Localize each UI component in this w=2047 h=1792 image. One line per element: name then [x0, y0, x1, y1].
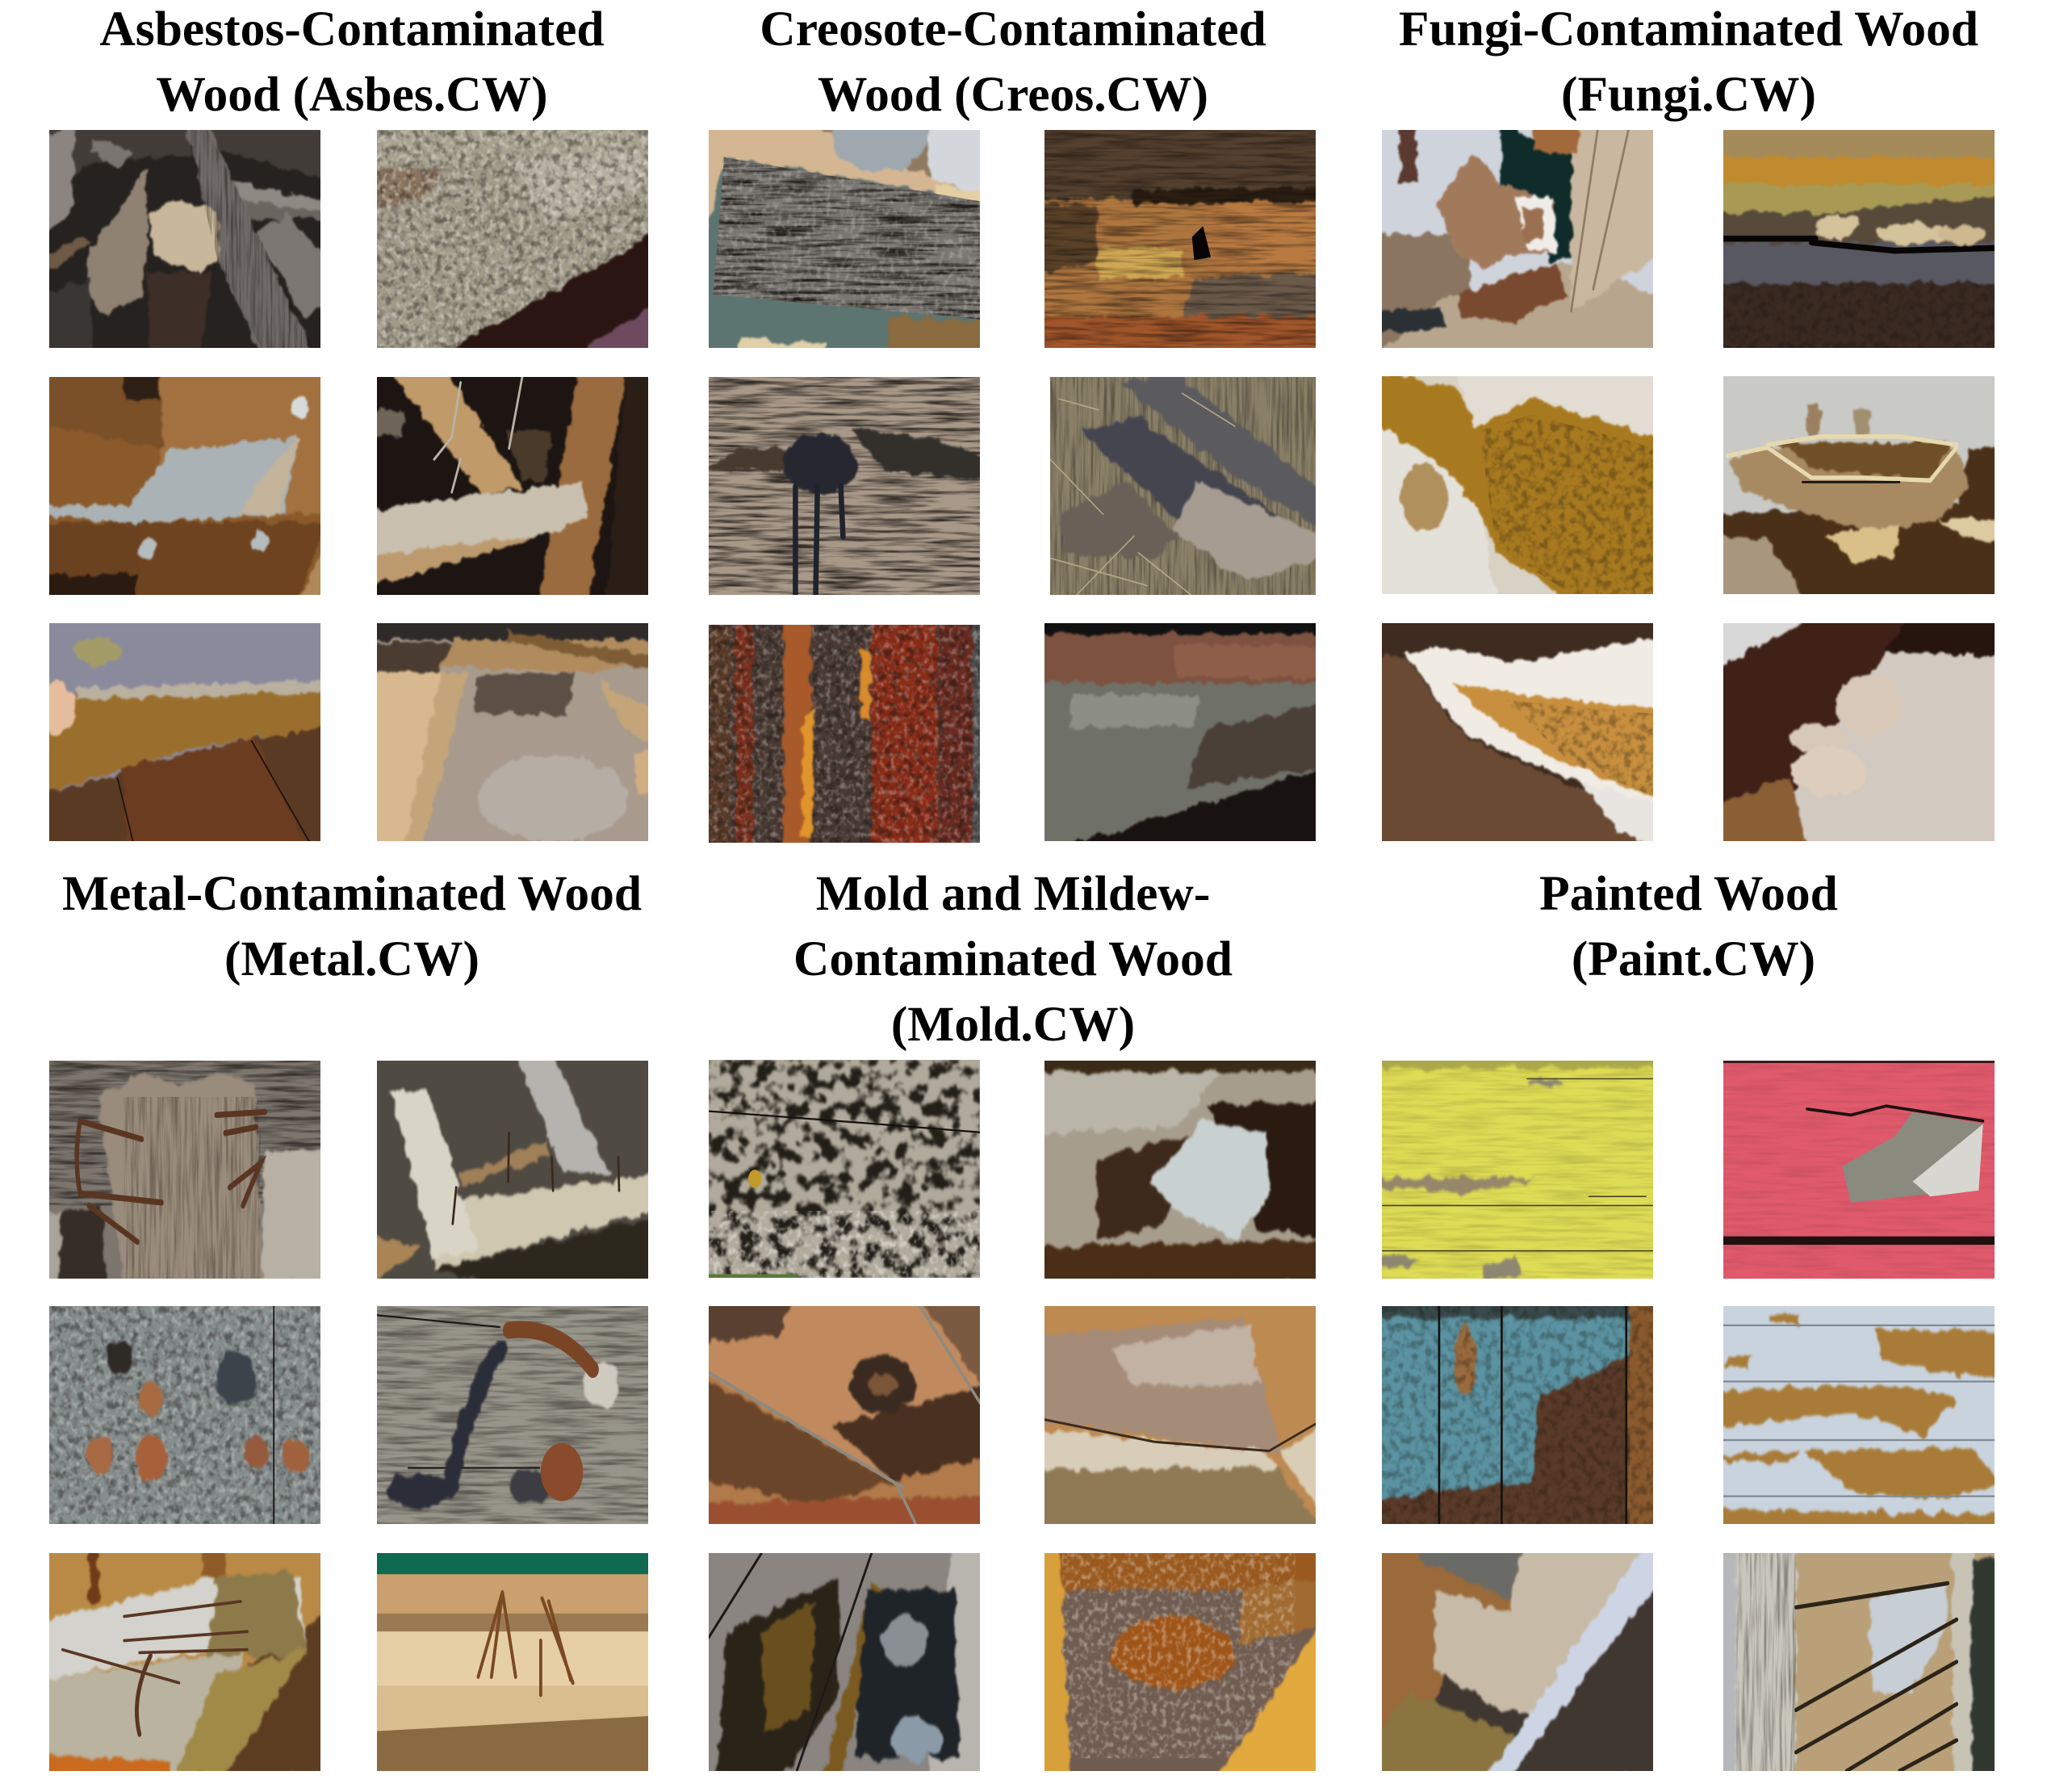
- photo: rusty bolts on blue-grey wood: [48, 1306, 320, 1524]
- photo: grey-white mold on tan ceiling above wall: [1044, 1306, 1316, 1524]
- heading: creosote-contaminated wood: [760, 2, 1266, 122]
- heading: asbestos-contaminated wood: Asbestos-Contaminated: [99, 2, 605, 57]
- photo: peeling yellow paint: [1382, 1061, 1653, 1279]
- panel: fungi-contaminated wood: [1382, 2, 1995, 841]
- photo: charred orange beam with hole: [1044, 130, 1316, 348]
- photo: fibrous asbestos sheet over dark gap: [377, 130, 648, 348]
- photo: lifted grey-yellow asbestos felt on floor boards: [48, 623, 320, 841]
- photo: white mycelium with orange brackets: [1382, 623, 1653, 841]
- photo: rusty nails in blurred pale lumber: [377, 1553, 648, 1771]
- photo: nails through white painted boards: [377, 1061, 648, 1279]
- photo: flaking white paint over ochre siding: [1723, 1306, 1995, 1524]
- heading: painted wood: [1539, 866, 1838, 986]
- photo: weathered grain with creosote bleed: [709, 376, 980, 594]
- heading: painted wood: Painted Wood: [1539, 866, 1838, 921]
- heading: metal-contaminated wood: Metal-Contaminated Wood: [62, 866, 642, 921]
- photo: chipped teal paint on brown boards: [1382, 1306, 1653, 1524]
- heading: creosote-contaminated wood: Creosote-Contaminated: [760, 2, 1266, 57]
- photo: speckled white mold on orange wood: [1044, 1553, 1316, 1771]
- heading: metal-contaminated wood: [62, 866, 642, 986]
- panel: mold and mildew-contaminated wood: [709, 866, 1316, 1771]
- heading: metal-contaminated wood: (Metal.CW): [224, 932, 479, 986]
- panel: painted wood: [1382, 866, 1995, 1771]
- heading: fungi-contaminated wood: Fungi-Contaminated Wood: [1399, 2, 1978, 57]
- photo: white and brown mold on beam: [1044, 1061, 1316, 1279]
- panel: creosote-contaminated wood: [709, 2, 1316, 843]
- heading: fungi-contaminated wood: (Fungi.CW): [1561, 67, 1816, 122]
- heading: asbestos-contaminated wood: [99, 2, 605, 122]
- photo: ochre fungal mass in wall corner: [1382, 376, 1653, 594]
- photo: rusted bent nail with shadow: [377, 1306, 648, 1524]
- photo: brown fungus on door frame: [1382, 130, 1653, 348]
- photo: wood chips with light cut block: [48, 130, 320, 348]
- photo: long rusty nails through white plank: [48, 1553, 320, 1771]
- photo: worn cream paint on beam corner: [1382, 1553, 1653, 1771]
- panel: asbestos-contaminated wood: [49, 2, 648, 841]
- photo: grey fibre pile between joists: [377, 623, 648, 841]
- photo: dark planks in dry grass: [1050, 376, 1316, 594]
- photo: mottled black mold on grey board: [709, 1060, 980, 1278]
- heading: mold and mildew-contaminated wood: Mold and Mildew-: [816, 866, 1210, 921]
- panel: metal-contaminated wood: [49, 866, 648, 1771]
- heading: painted wood: (Paint.CW): [1572, 932, 1815, 986]
- heading: asbestos-contaminated wood: Wood (Asbes.CW): [156, 67, 548, 122]
- photo: asbestos fibre on attic beams: [377, 376, 648, 594]
- photo: alligatored white paint on siding: [1723, 1553, 1995, 1771]
- photo: pale mushrooms on white floor: [1723, 623, 1995, 841]
- photo: tan fungal crust on white wall base: [1723, 376, 1995, 594]
- photo: pale brackets along a crack in yellow wood: [1723, 130, 1995, 348]
- heading: fungi-contaminated wood: [1399, 2, 1978, 122]
- photo: bent rusty nails in post: [48, 1061, 320, 1279]
- heading: creosote-contaminated wood: Wood (Creos.CW): [818, 67, 1208, 122]
- photo: black and ochre mold on boards: [709, 1553, 980, 1771]
- photo: dark mold ring on ceiling boards: [709, 1306, 980, 1524]
- heading: mold and mildew-contaminated wood: [793, 866, 1233, 1052]
- photo: grey-green beam with dark shadow: [1044, 623, 1316, 841]
- photo: peeling pink paint with grey wood: [1723, 1061, 1995, 1279]
- heading: mold and mildew-contaminated wood: (Mold.CW): [891, 997, 1135, 1052]
- heading: mold and mildew-contaminated wood: Contaminated Wood: [793, 932, 1233, 986]
- photo: asbestos patch on brown timber: [48, 376, 320, 594]
- photo: weathered dark board: [709, 130, 980, 348]
- photo: red-black charred bark stripes: [709, 625, 980, 843]
